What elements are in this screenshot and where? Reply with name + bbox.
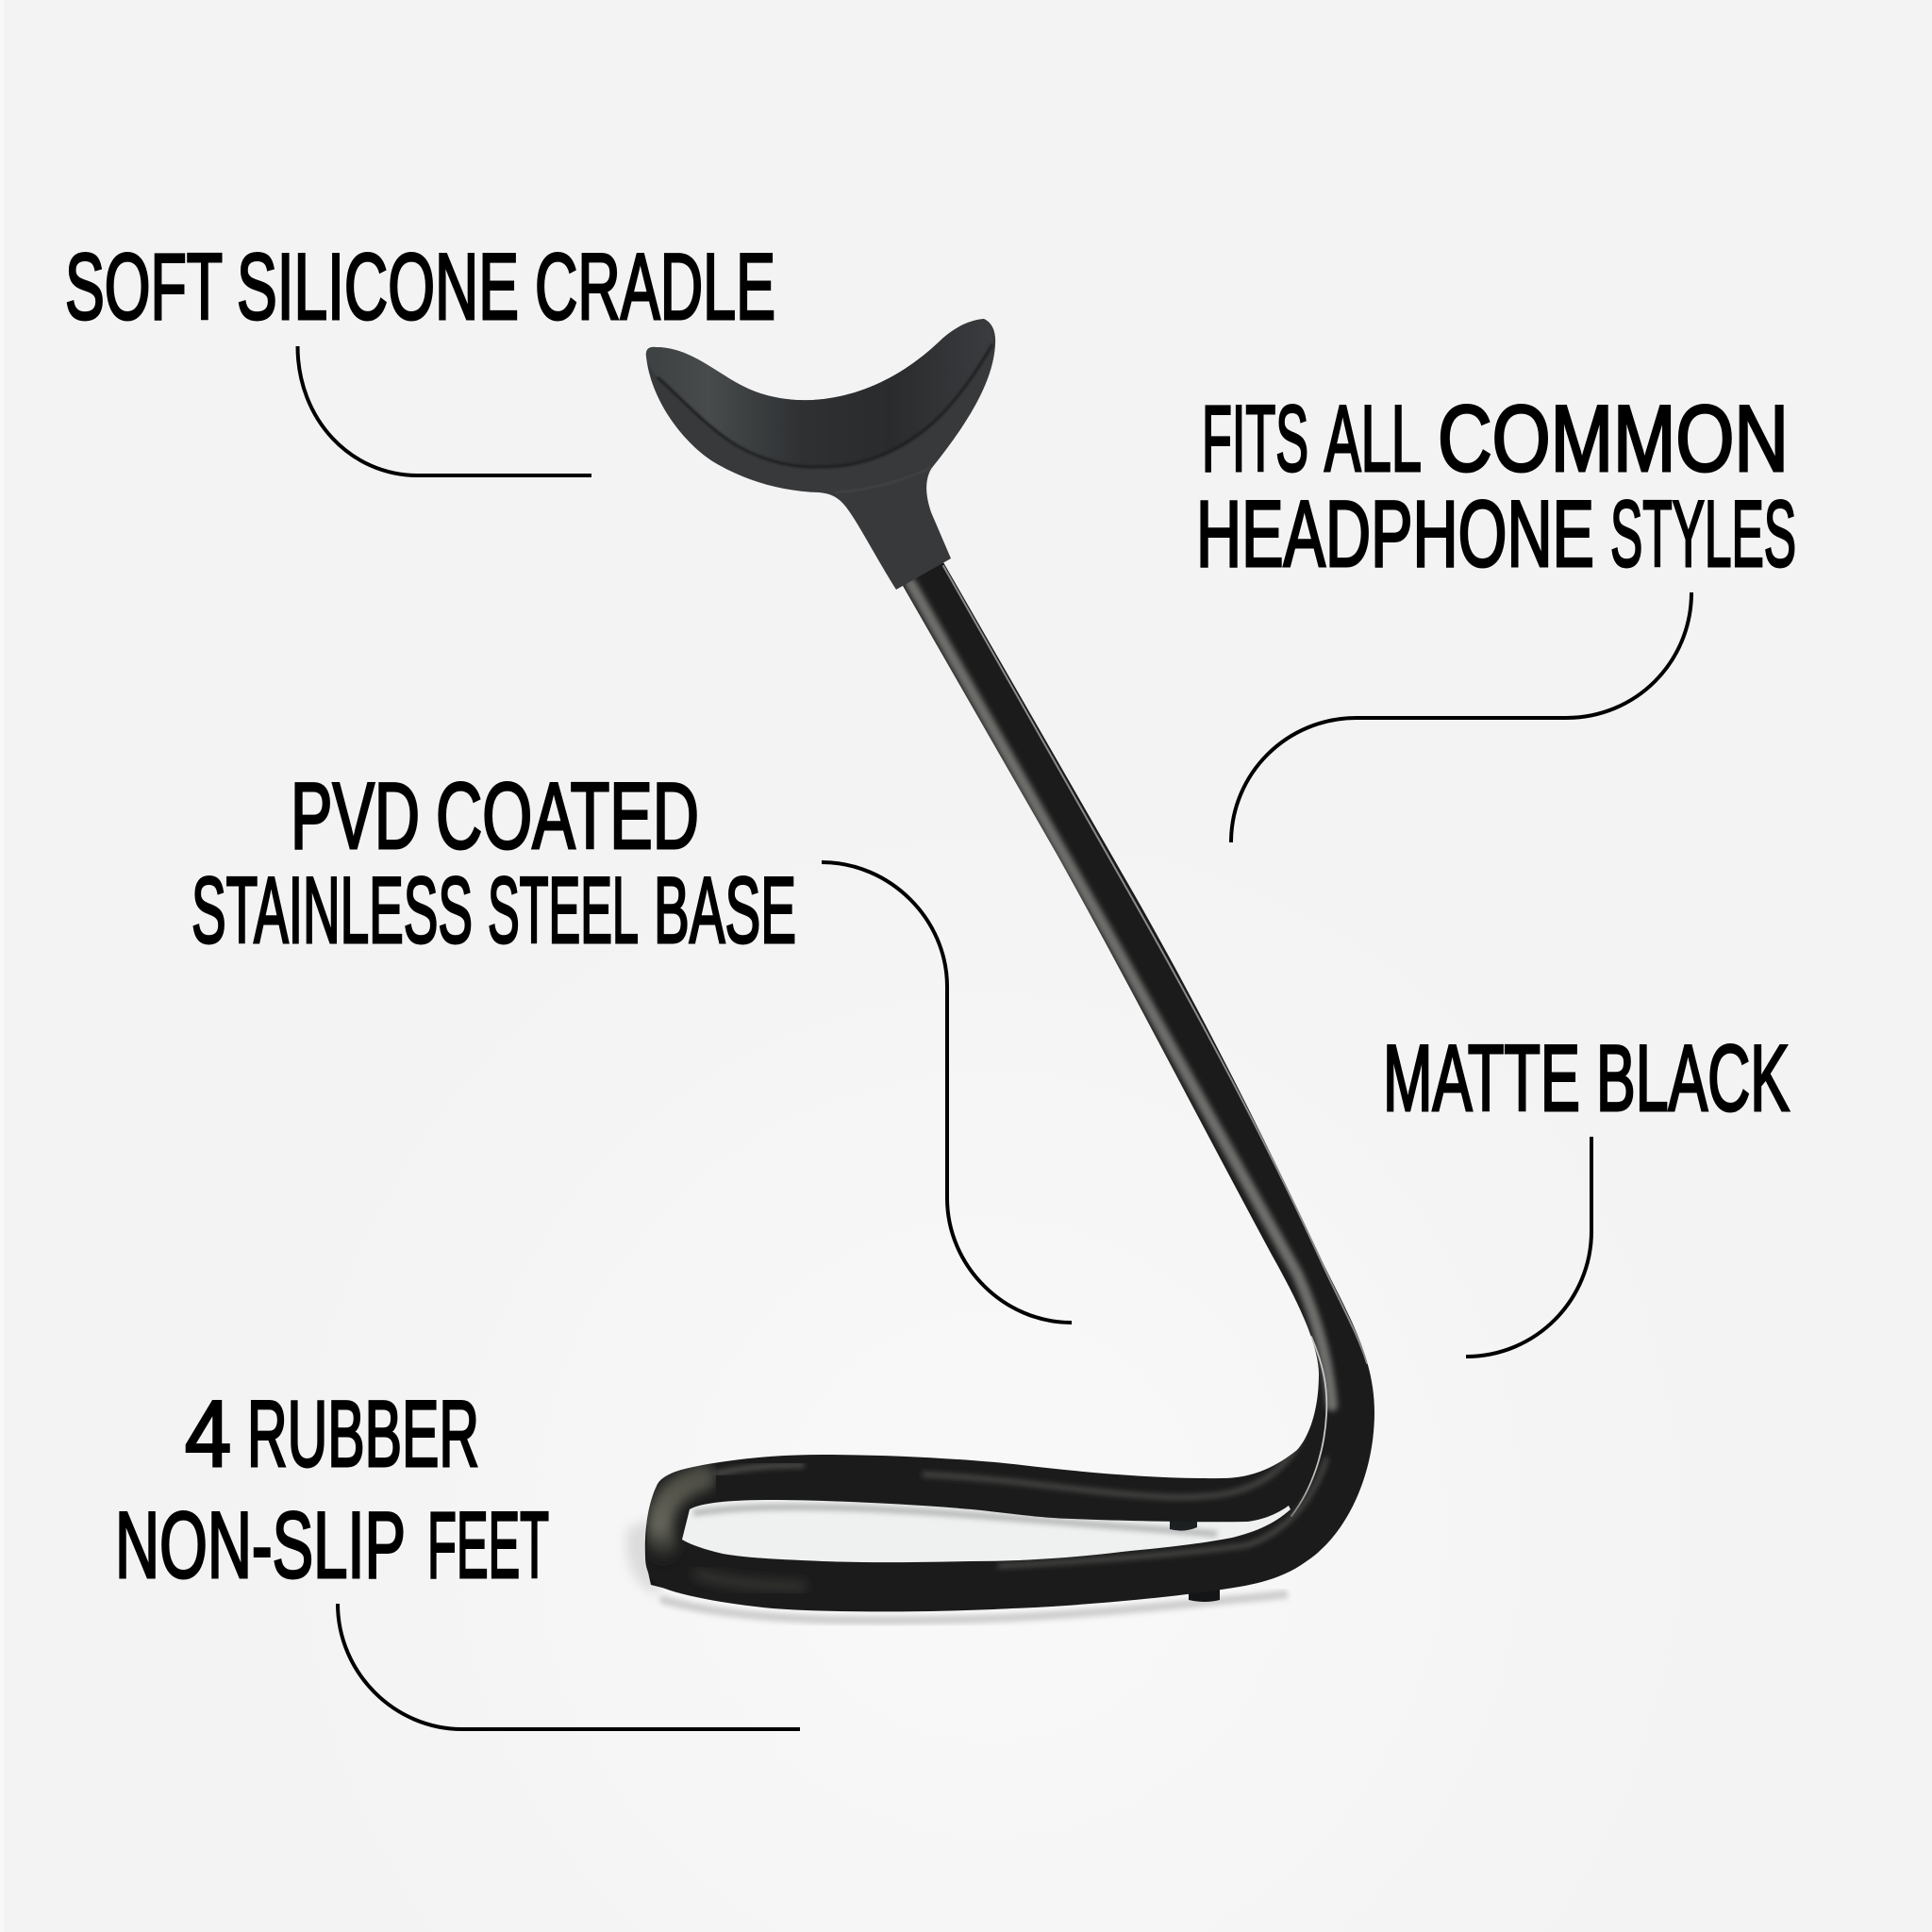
label: 4 rubber non-slip feet: NON-SLIP xyxy=(115,1492,406,1597)
label: PVD coated stainless steel base: BASE xyxy=(654,858,796,962)
leader line: 4 rubber non-slip feet xyxy=(338,1604,800,1729)
label: fits all common headphone styles: HEADPHONE xyxy=(1196,481,1594,586)
leader line: soft silicone cradle xyxy=(298,346,591,475)
label: 4 rubber non-slip feet: 4 xyxy=(185,1381,231,1486)
label: matte black: MATTE xyxy=(1383,1025,1580,1130)
label: soft silicone cradle: CRADLE xyxy=(535,234,775,339)
label: PVD coated stainless steel base: STAINLESS xyxy=(192,858,473,962)
leader line: PVD coated stainless steel base xyxy=(822,862,1072,1323)
label: fits all common headphone styles: FITS xyxy=(1202,386,1308,491)
label: PVD coated stainless steel base: STEEL xyxy=(488,858,639,962)
cradle body and neck xyxy=(646,319,995,590)
label: fits all common headphone styles xyxy=(1196,386,1796,586)
label: 4 rubber non-slip feet xyxy=(115,1381,549,1597)
label: 4 rubber non-slip feet: FEET xyxy=(427,1492,549,1597)
silicone cradle xyxy=(646,319,995,590)
product: headphone stand xyxy=(626,319,1374,1621)
leader line: fits all common headphone styles xyxy=(1231,592,1691,842)
tubular steel frame xyxy=(645,538,1374,1611)
cradle crease xyxy=(658,344,992,467)
label: PVD coated stainless steel base: COATED xyxy=(436,763,699,868)
label: matte black: BLACK xyxy=(1596,1025,1790,1130)
rubber feet xyxy=(647,1514,1220,1602)
label: soft silicone cradle xyxy=(65,234,775,339)
label: fits all common headphone styles: COMMON xyxy=(1438,386,1789,491)
leader line: matte black xyxy=(1466,1137,1591,1357)
floor shadows xyxy=(626,1500,1291,1621)
tube highlights xyxy=(659,566,1367,1587)
label: soft silicone cradle: SOFT xyxy=(65,234,223,339)
cradle inner face xyxy=(646,319,992,467)
neck seam xyxy=(835,468,931,492)
label: PVD coated stainless steel base: PVD xyxy=(291,763,420,868)
label: 4 rubber non-slip feet: RUBBER xyxy=(247,1381,479,1486)
label: PVD coated stainless steel base xyxy=(192,763,796,962)
label: fits all common headphone styles: ALL xyxy=(1324,386,1422,491)
label: soft silicone cradle: SILICONE xyxy=(237,234,519,339)
